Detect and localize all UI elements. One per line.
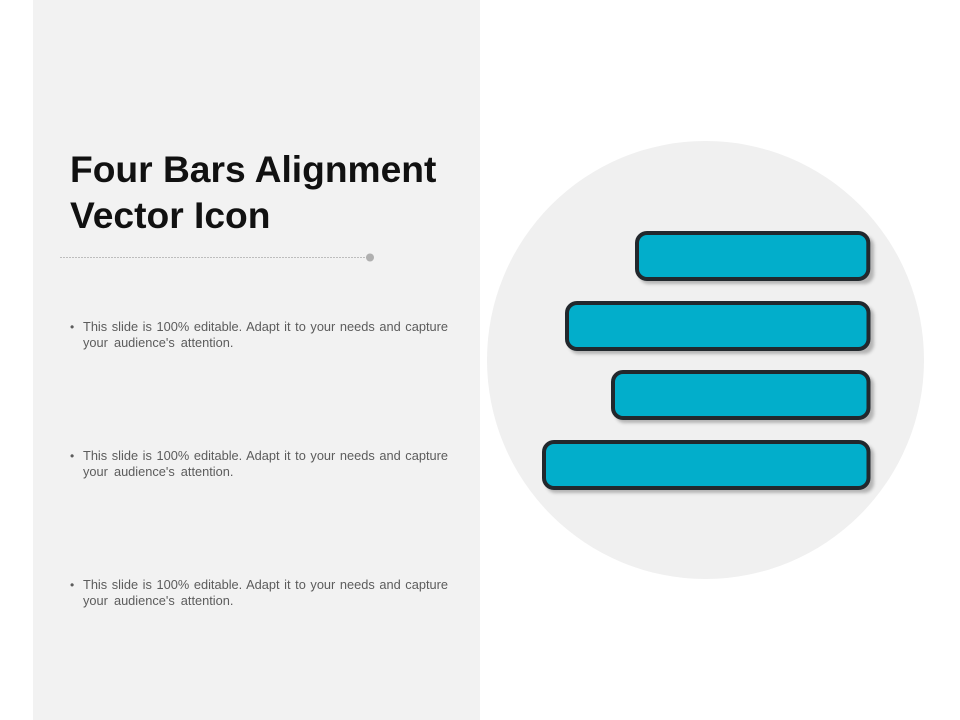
- text block 2: [70, 448, 448, 479]
- text block 2: This slide is 100% editable. Adapt it to your needs and capture: [83, 448, 448, 463]
- text block 1: This slide is 100% editable. Adapt it to your needs and capture: [83, 319, 448, 334]
- bar shadows: [546, 236, 874, 493]
- bars: [544, 233, 868, 488]
- text block 1: •: [70, 320, 74, 334]
- panel: left sidebar: [33, 0, 480, 720]
- title: Vector Icon: [70, 194, 270, 236]
- text block 3: your audience's attention.: [83, 593, 233, 608]
- divider with dot: [60, 254, 374, 262]
- text block 2: your audience's attention.: [83, 464, 233, 479]
- text block 3: [70, 577, 448, 608]
- title: [70, 148, 436, 236]
- text block 3: This slide is 100% editable. Adapt it to your needs and capture: [83, 577, 448, 592]
- title: Four Bars Alignment: [70, 148, 436, 190]
- text block 2: •: [70, 449, 74, 463]
- text block 1: your audience's attention.: [83, 335, 233, 350]
- text block 3: •: [70, 578, 74, 592]
- text block 1: [70, 319, 448, 350]
- background circle: [487, 141, 924, 579]
- icon: four right-aligned bars in circle: [487, 141, 924, 579]
